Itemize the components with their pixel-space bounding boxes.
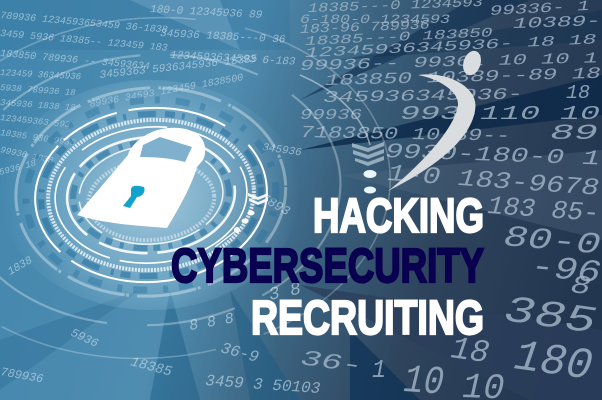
digit rows left: 180-0 12345936 89 <box>150 4 263 22</box>
digit rows right: 80-0 <box>502 221 602 263</box>
digit rows left: 3459 5936 18385-- 123459 183 <box>0 29 168 55</box>
padlock shackle opening <box>140 137 192 162</box>
digit rows left: 36-9 <box>219 339 260 367</box>
digit rows left: 1838 <box>6 255 35 278</box>
icon: company figure logo <box>388 48 484 191</box>
digit rows right: 36- <box>299 346 364 380</box>
digit rows right: 9930-180-0 1 <box>385 141 600 171</box>
digit rows left: 18385 936 9936 <box>0 128 76 149</box>
digit rows right <box>299 0 602 400</box>
arc towards logo <box>300 75 370 145</box>
digit rows right: 12345936345936- 18 18 <box>304 32 597 62</box>
icon: keyhole <box>123 186 145 208</box>
title: HACKING: HACKING <box>313 190 484 243</box>
digit rows right: 183850 10389--89 18 <box>325 65 602 90</box>
digit rows right: 8 <box>569 270 592 302</box>
digit rows left: 183850 789936 -- 34593634 <box>0 49 150 73</box>
digit rows left: 123459363 593 <box>0 113 71 130</box>
digit rows left <box>0 4 321 398</box>
digit rows right: 345936345936- <box>323 86 523 107</box>
title: CYBERSECURITY: CYBERSECURITY <box>171 240 484 293</box>
digit rows left: 89936 34593 123459 1838500 <box>89 73 244 111</box>
digit rows right: 10389- <box>513 13 601 33</box>
digit rows right: -96 <box>529 248 602 292</box>
digit rows left: 7893 <box>258 190 293 219</box>
digit rows left: 3459 3 50103 <box>205 372 321 398</box>
digit rows right: 6-180-0 1234593 <box>300 12 450 27</box>
digit rows left: 789936 <box>0 365 44 386</box>
digit rows right: 89 <box>550 121 598 146</box>
digit rows right: 99936 <box>300 107 362 124</box>
digit rows left: 123459 36345936 <box>0 68 82 82</box>
chevrons and connector dots <box>215 142 384 247</box>
concentric security rings <box>0 2 402 374</box>
digit rows right: 1-0 183-9678 <box>386 161 600 203</box>
digit rows right: 18 <box>449 330 491 372</box>
digit rows right: 18385---0 183850 <box>304 25 493 49</box>
title: RECRUITING: RECRUITING <box>251 292 484 345</box>
digit rows left: 345936 18385---0 36 <box>160 28 286 47</box>
digit rows right: 7183850 10 89-- <box>300 124 510 147</box>
icon: padlock <box>77 128 205 228</box>
digit rows right: 99936-- 99361 10 10 1 <box>300 50 598 75</box>
digit rows right: 385 <box>501 289 598 345</box>
digit rows left: 3 8 <box>267 280 303 306</box>
digit rows right: 18 <box>566 82 590 104</box>
digit rows left: 345936 <box>261 142 303 160</box>
digit rows left: 8 8 8 <box>188 310 235 335</box>
digit rows left: 18385 <box>129 354 174 381</box>
digit rows right: 183 85- <box>486 191 600 229</box>
digit rows left: 345936 1838 18 <box>0 98 77 113</box>
digit rows left: 789936 1234593653459 36-1838 <box>0 11 168 37</box>
digit rows left: 3459363 5936345936 18385 <box>99 53 258 82</box>
digit rows right: 180 <box>511 332 595 393</box>
digit rows left: 1234593634593 6-183 <box>170 50 296 69</box>
digit rows right: 993-110 10 <box>400 103 600 125</box>
digit rows left: 5938 789936 18 <box>0 83 77 98</box>
digit rows right: 99336- 1 <box>489 0 590 20</box>
digit rows right: 1 <box>372 355 386 385</box>
glow behind padlock <box>0 80 300 310</box>
digit rows left: 99936 1838 <box>0 145 55 166</box>
digit rows right: 183-96 789936 <box>300 17 430 37</box>
digit rows left: 5936 <box>68 326 100 351</box>
